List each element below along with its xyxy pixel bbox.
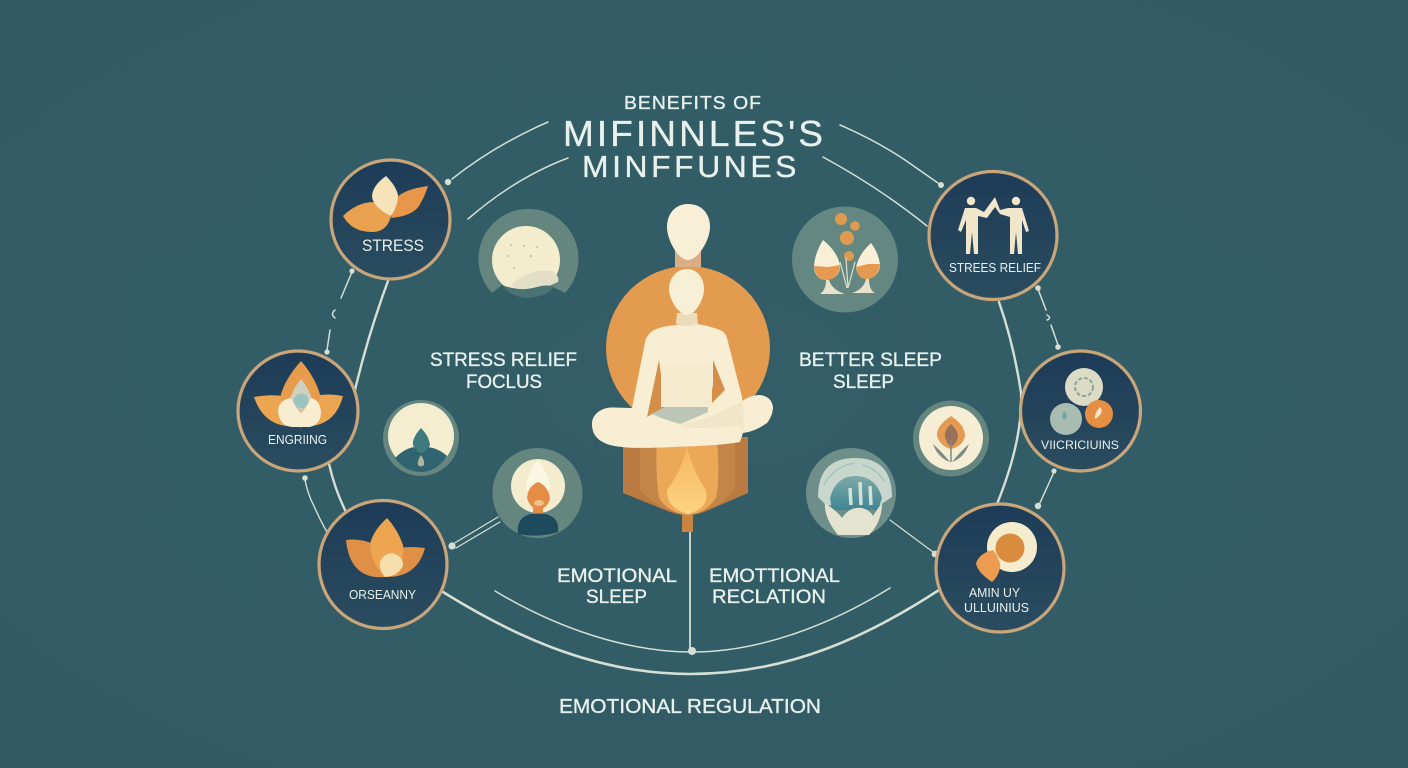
icon: egg and leaf	[976, 522, 1037, 582]
panel: engriing badge: ENGRIING	[268, 433, 327, 447]
text: emotional sleep	[557, 565, 677, 608]
upper head	[667, 204, 710, 267]
panel: stress relief badge	[929, 172, 1057, 300]
text: emottional reclation	[709, 565, 840, 608]
icon: flower on cream circle	[913, 400, 989, 476]
panel: vicriciuins badge	[1020, 351, 1140, 471]
icon: two people touching hands	[958, 197, 1029, 254]
gap: right arm	[708, 360, 725, 407]
title: MINFFUNES	[582, 149, 800, 184]
orange sun circle	[606, 266, 770, 430]
panel: amin uy ulluinius badge: AMIN UY	[969, 585, 1020, 600]
text: stress relief focus	[430, 349, 577, 393]
text: emottional reclation: EMOTTIONAL	[709, 565, 840, 587]
icon: moon landscape	[478, 209, 578, 298]
icon: lotus	[254, 361, 343, 428]
icon: person with flame	[492, 448, 582, 538]
connecting rings and lines	[302, 122, 1061, 674]
title	[563, 92, 826, 184]
icon: hands holding dome	[806, 448, 896, 538]
icon: three circles	[1050, 368, 1113, 435]
panel: vicriciuins badge: VIICRICIUINS	[1041, 438, 1119, 452]
icon: orange leaves	[346, 518, 425, 577]
pedestal with flame	[623, 437, 748, 532]
seated body	[592, 269, 773, 448]
panel: stress badge	[331, 160, 450, 279]
text: stress relief focus: STRESS RELIEF	[430, 349, 577, 371]
icon: drop in moon	[383, 400, 459, 476]
text: emottional reclation: RECLATION	[712, 586, 826, 608]
text: better sleep	[799, 349, 942, 393]
text: stress relief focus: FOCLUS	[466, 371, 542, 393]
text: emotional sleep: SLEEP	[586, 586, 647, 608]
central meditating figure	[592, 204, 773, 532]
text: better sleep: SLEEP	[833, 371, 894, 393]
panel: orseanny badge: ORSEANNY	[349, 587, 416, 602]
title: BENEFITS OF	[624, 92, 762, 113]
panel: amin uy ulluinius badge: ULLUINIUS	[964, 600, 1029, 615]
panel: stress relief badge: STREES RELIEF	[949, 260, 1041, 275]
text: emotional regulation: EMOTIONAL REGULATION	[559, 696, 821, 718]
panel: amin uy ulluinius badge	[936, 504, 1064, 632]
title: MIFINNLES'S	[563, 113, 826, 154]
panel: stress badge: STRESS	[362, 236, 424, 255]
panel: orseanny badge	[319, 500, 447, 628]
gap: left arm	[647, 360, 665, 417]
text: emotional sleep: EMOTIONAL	[557, 565, 677, 587]
icon: goblets and dots	[792, 206, 898, 312]
text: better sleep: BETTER SLEEP	[799, 349, 942, 371]
panel: engriing badge	[238, 351, 358, 471]
icon: leaves	[343, 176, 428, 232]
